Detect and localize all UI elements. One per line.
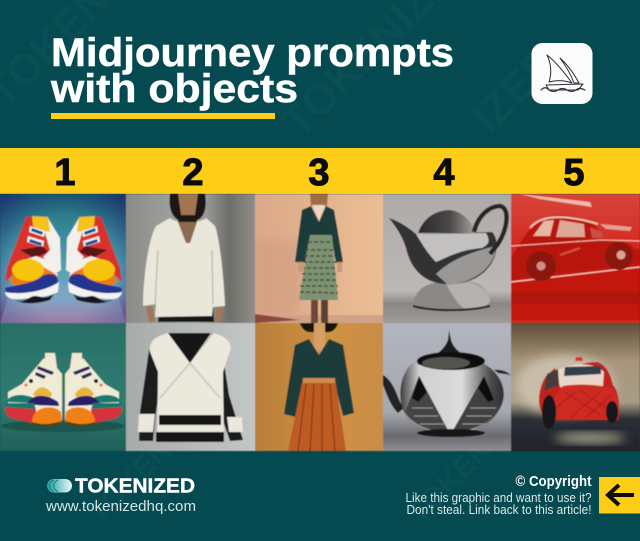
icon: Tokenized pill mark (47, 479, 72, 492)
watermark pattern: TOKENIZED (82, 384, 227, 530)
wordmark: TOKENIZED (75, 476, 195, 498)
icon: Midjourney sailboat logo (532, 43, 592, 104)
image: dark top and orange pleated skirt (255, 323, 383, 451)
image: white and black striped sweater (126, 323, 255, 451)
image: white sweater on model (126, 194, 255, 323)
copyright notice: © Copyright (516, 474, 592, 490)
footer logo: Tokenized (47, 476, 195, 498)
copyright notice: Don't steal. Link back to this article! (406, 502, 592, 517)
website url: www.tokenizedhq.com (45, 499, 196, 515)
title: with objects (50, 67, 298, 111)
step numbers: 2 (182, 152, 204, 194)
title underline (51, 113, 275, 119)
step numbers (54, 152, 585, 194)
copyright notice: Like this graphic and want to use it? (406, 490, 592, 505)
title: Midjourney prompts (51, 31, 454, 75)
image: red car on red background (511, 194, 640, 323)
step numbers: 5 (563, 152, 585, 194)
title (50, 31, 454, 111)
watermark pattern (20, 226, 594, 412)
copyright notice (406, 474, 592, 517)
watermark pattern: IZED (462, 37, 568, 142)
arrow callout (599, 477, 640, 514)
image: quilted red car on dusty background (511, 323, 640, 451)
image: geometric patterned teapot (383, 323, 511, 451)
image: dark top and green patterned skirt (255, 194, 383, 323)
image: colourful sneakers, variation B (0, 323, 126, 451)
image grid (0, 194, 640, 451)
yellow number band (0, 148, 640, 194)
watermark pattern: TOKENIZED (402, 384, 547, 530)
step numbers: 4 (433, 152, 455, 194)
image: colourful sneakers, variation A (0, 194, 126, 323)
image: black and grey teapot on pedestal (383, 194, 511, 323)
step numbers: 3 (308, 152, 330, 194)
step numbers: 1 (54, 152, 76, 194)
